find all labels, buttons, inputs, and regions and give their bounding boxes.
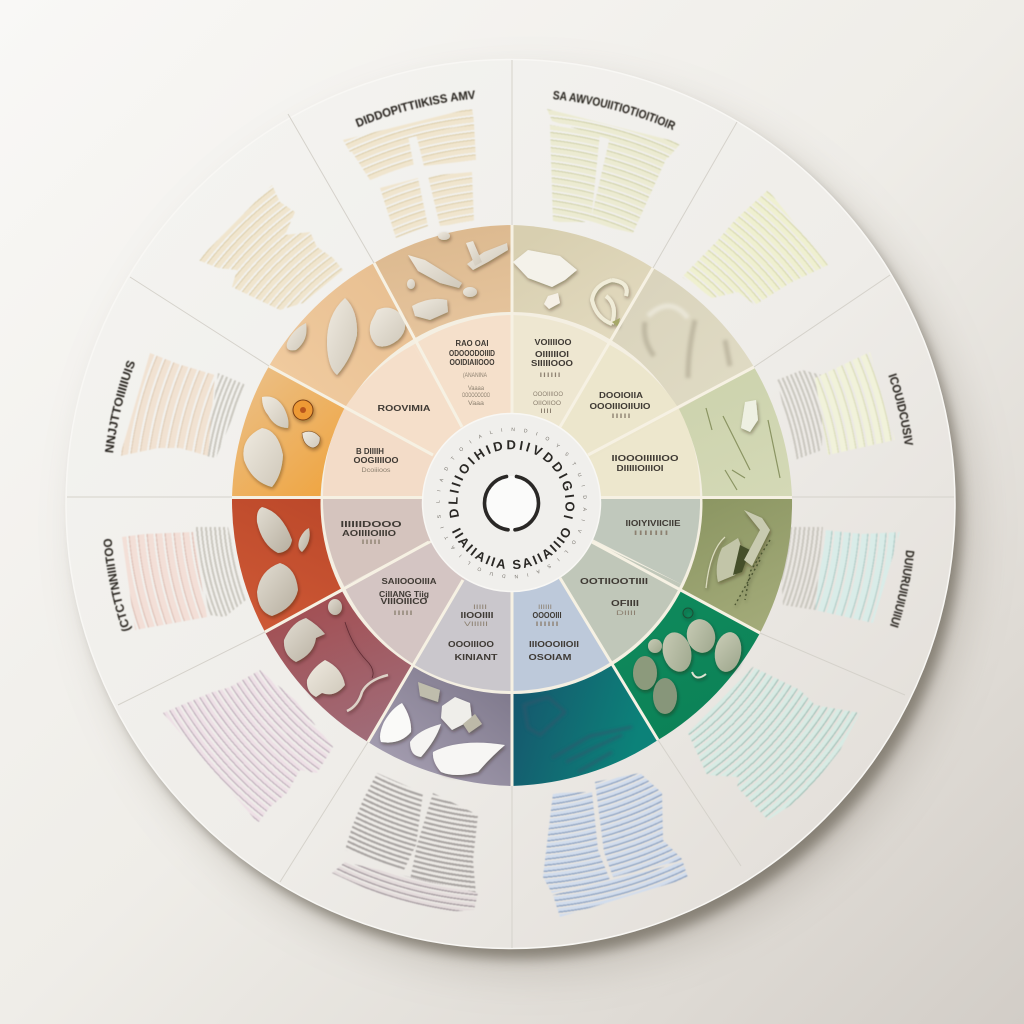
inner labels: pale blue: [528, 605, 579, 662]
centre hub: [484, 476, 538, 530]
segment: red: [232, 498, 512, 632]
specimen pieces: sand: [407, 232, 508, 320]
inner labels: pale cream: IIII: [540, 409, 553, 415]
inner labels: maroon: [379, 577, 437, 617]
inner labels: pale blue: IIIIII: [538, 605, 552, 611]
segment: olive: [512, 498, 792, 633]
specimen pieces: cream: [513, 250, 627, 327]
inner wedge 2: [344, 345, 512, 503]
inner labels: red: [340, 520, 402, 546]
specimen pieces: olive: [706, 510, 770, 605]
inner labels: pale sage: DIIIIIOIIIOI: [616, 464, 664, 473]
inner labels: pale cream: OIIIIIIOI: [535, 350, 569, 359]
inner labels: sand: (ANANINA: [463, 373, 487, 379]
inner labels: sand: Vaaa: [468, 401, 485, 407]
inner labels: grey green upper: [626, 519, 681, 537]
heading: top right: SA AWVOUIITIOTIOITIOIR: [552, 90, 676, 131]
panel: bottom right text lines: [543, 773, 688, 917]
inner labels: slate: IIOOIIII: [460, 611, 494, 620]
outer disc: [66, 60, 955, 948]
colour ring: [232, 225, 792, 786]
centre disc: [422, 412, 602, 592]
panel: upper right text lines: [682, 190, 828, 305]
segment: sand: [374, 225, 512, 503]
inner labels: pale cream: [531, 338, 573, 415]
inner wedge 6: [413, 503, 512, 691]
inner wedge 5: [344, 503, 512, 664]
inner label: apricot: ROOVIMIA: [378, 404, 431, 413]
inner labels: pale sage: [612, 454, 678, 473]
inner labels: pale beige: IIIII: [611, 414, 632, 420]
inner labels: sand: OOOOOOOOO: [462, 393, 490, 399]
inner labels: orange: B DIIIIH: [356, 447, 384, 456]
inner labels: slate: [448, 605, 498, 662]
text lines: left lower: [122, 527, 246, 630]
inner wedge 12: [511, 315, 610, 503]
specimen pieces: sage: [706, 400, 780, 490]
inner labels: pale cream: VOIIIIOO: [534, 338, 572, 347]
heading: right upper: ICOUIDCUSIV: [888, 372, 914, 446]
panel: lower left text lines: [163, 670, 333, 823]
inner labels: grey green lower: [580, 577, 648, 617]
inner wedge 7: [511, 503, 611, 691]
panel: upper left text lines: [198, 185, 343, 310]
inner wedge 11: [512, 345, 679, 503]
segment: slate purple: [368, 503, 512, 786]
segment: emerald: [512, 503, 760, 740]
inner labels: pale blue: OOOOIII: [532, 611, 562, 620]
panel: top left text: [343, 90, 476, 238]
inner labels: grey green lower: OFIIII: [611, 599, 639, 608]
panel: lower right text lines: [688, 667, 860, 820]
heading: left upper: NNJJTTOIIIIIUIS: [104, 360, 136, 454]
inner wedge 1: [413, 315, 512, 503]
segment: apricot: [269, 263, 512, 503]
inner labels: sand: OOIDIAIIOOO: [450, 358, 494, 367]
inner wedge 4: [323, 498, 512, 586]
large ring text lower: IIAIIAIIA SAIIAIIIO: [452, 528, 570, 569]
inner labels: slate: VIIIIII: [464, 622, 489, 628]
inner labels: pale cream: OOOIIIIOO: [533, 392, 563, 398]
inner labels: maroon: VIIIOIIICO: [380, 597, 428, 606]
specimen pieces: slate purple: [380, 682, 505, 775]
inner labels: slate: KINIANT: [454, 653, 498, 662]
inner labels: pale blue: IIIIII: [535, 622, 560, 628]
inner labels: pale cream: IIIIII: [539, 373, 562, 379]
segment: maroon: [265, 503, 512, 742]
inner labels: orange: Dcoiiioos: [362, 468, 390, 474]
heading: top left: DIDDOPITTIIKISS AMV: [354, 90, 476, 128]
inner labels: pale beige: [590, 391, 650, 420]
panel: right upper text: [777, 353, 914, 460]
inner wedge 8: [512, 503, 681, 662]
segment: sage: [512, 367, 792, 497]
inner labels: orange: OOGIIIIOO: [354, 456, 398, 465]
specimen pieces: orange: [243, 396, 320, 487]
text lines: right lower: [778, 527, 900, 623]
inner labels: pale cream: OIIOIIOO: [533, 401, 561, 407]
inner labels: sand: ODOOODOIIID: [449, 349, 495, 358]
inner labels: pale beige: OOOIIIOIIUIO: [590, 402, 650, 411]
inner wedge 10: [512, 409, 700, 497]
inner labels: grey green upper: IIIIIII: [633, 531, 670, 537]
inner base: [320, 312, 702, 694]
inner ring: [320, 312, 702, 694]
specimen pieces: maroon: [284, 599, 388, 711]
inner labels: maroon: IIIII: [393, 611, 414, 617]
inner labels: pale blue: OSOIAM: [528, 653, 572, 662]
inner labels: maroon: CiIIANG Tiig: [379, 590, 429, 599]
inner labels: maroon: SAIIOOOIIIA: [382, 577, 437, 586]
inner labels: red: AOIIIIOIIIO: [342, 529, 396, 538]
segment: cream: [512, 225, 653, 503]
panel: right lower text: [781, 526, 916, 628]
inner labels: sand: [449, 339, 495, 407]
inner labels: red: IIIIIIDOOO: [340, 520, 402, 529]
segment: deep teal: [512, 503, 658, 786]
inner labels: pale beige: DOOIOIIA: [599, 391, 643, 400]
inner labels: orange: [354, 447, 398, 474]
specimen pieces: red: [257, 507, 310, 616]
specimen pieces: beige: [644, 306, 730, 378]
panel: left lower text: [102, 526, 246, 632]
inner labels: slate: IIIII: [473, 605, 488, 611]
inner labels: sand: Vaaaa: [468, 386, 485, 392]
inner labels: sand: RAO OAI: [456, 339, 488, 348]
panel: bottom left text lines: [332, 773, 478, 912]
centre disc base: [422, 414, 600, 592]
outer panel dividers: [67, 60, 954, 948]
inner labels: pale sage: IIOOOIIIIIIOO: [612, 454, 678, 463]
small outer ring text: L I A D T O I A L I N D I O Y S T U I D A I V O L I S A I N D U O L I A T I S: [436, 428, 587, 578]
inner labels: pale blue: IIIOOOIIOII: [529, 640, 579, 649]
inner labels: grey green lower: OOTIIOOTIIII: [580, 577, 648, 586]
inner labels: red: IIIII: [361, 540, 382, 546]
inner wedge 3: [323, 409, 512, 497]
heading: left lower: (CTCTTNNIIITOO: [102, 538, 133, 632]
centre dashed ring: [485, 476, 538, 530]
disc shadow: [76, 73, 972, 970]
inner wedge 9: [512, 498, 700, 584]
panel: top right text: [547, 90, 680, 233]
inner labels: pale cream: SIIIIIOOO: [531, 359, 573, 368]
specimen pieces: deep teal: [524, 697, 632, 772]
inner labels: grey green lower: DIIII: [616, 611, 637, 617]
panel: left upper text: [104, 353, 245, 458]
segment: orange: [232, 366, 512, 497]
text lines: left upper: [120, 353, 246, 458]
inner labels: slate: OOOIIIOO: [448, 640, 494, 649]
wheel spokes: [232, 225, 792, 786]
text lines: top left: [343, 108, 476, 238]
heading: right lower: DUIURUIUIUIIUI: [890, 550, 916, 628]
text lines: right upper: [777, 352, 895, 460]
text lines: top right: [547, 109, 681, 233]
specimen pieces: apricot: [287, 298, 405, 375]
segment: beige: [512, 268, 754, 503]
inner labels: grey green upper: IIOIYIVIICIIE: [626, 519, 681, 528]
large ring text upper: DLIIIOIHIDDIIVDDIGIOI: [448, 440, 574, 519]
specimen pieces: emerald: [633, 608, 744, 714]
